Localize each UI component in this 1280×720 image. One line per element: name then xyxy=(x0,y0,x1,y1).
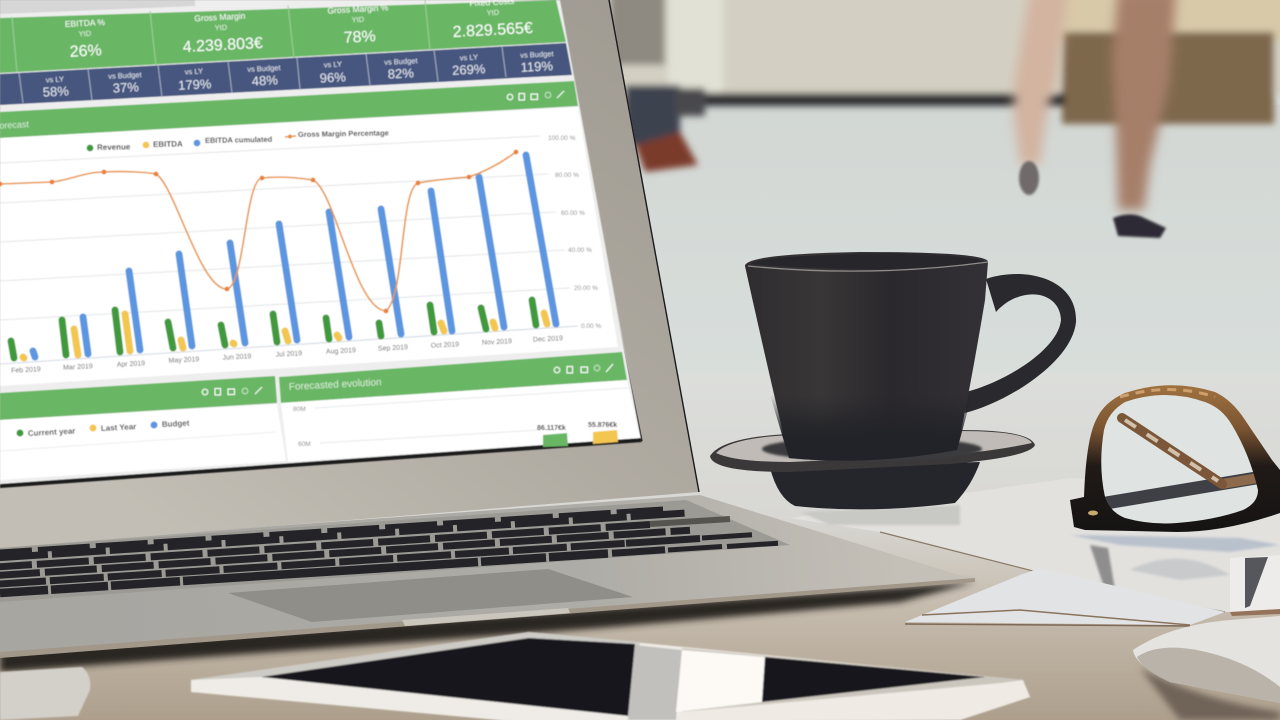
KPI comparison navy band: 119% xyxy=(520,58,554,75)
KPI comparison navy band: vs LY xyxy=(324,60,342,69)
bottom right panel: forecasted evolution: 80M xyxy=(293,406,306,413)
KPI comparison navy band: 37% xyxy=(112,79,140,96)
KPI comparison navy band: vs LY xyxy=(460,53,478,62)
month axis labels: Oct 2019 xyxy=(431,341,459,350)
month axis labels xyxy=(11,335,563,375)
computer mouse xyxy=(1133,616,1280,720)
chart legend: Revenue xyxy=(97,142,131,152)
chart legend: EBITDA cumulated xyxy=(205,135,273,145)
coffee cup xyxy=(745,252,1076,461)
month axis labels: Mar 2019 xyxy=(63,363,93,372)
month axis labels: Jul 2019 xyxy=(276,350,302,359)
tablet xyxy=(191,632,1030,720)
right axis labels: 60.00 % xyxy=(561,210,585,217)
KPI comparison navy band: vs Budget xyxy=(384,56,419,67)
KPI comparison navy band: 179% xyxy=(178,76,212,93)
right axis labels: 0.00 % xyxy=(581,323,601,330)
month axis labels: Dec 2019 xyxy=(533,335,563,344)
KPI: Fixed Costs xyxy=(452,0,533,41)
right axis labels: 40.00 % xyxy=(568,247,592,254)
KPI: Fixed Costs: YtD xyxy=(486,8,500,17)
KPI: Fixed Costs: 2.829.565€ xyxy=(452,20,533,41)
bottom right panel: forecasted evolution: Forecasted evolution xyxy=(289,377,382,393)
KPI: Gross Margin %: 78% xyxy=(343,28,376,47)
orange gross margin line xyxy=(0,150,518,313)
KPI: Gross Margin %: Gross Margin % xyxy=(327,2,389,16)
chart legend: EBITDA xyxy=(153,139,183,149)
month axis labels: May 2019 xyxy=(168,356,200,365)
desk surface xyxy=(0,372,1280,720)
pen on desk xyxy=(0,667,90,720)
blue EBITDA cumulated bars xyxy=(33,155,556,357)
KPI comparison navy band: 48% xyxy=(251,72,279,89)
bottom right panel: forecasted evolution xyxy=(279,352,640,462)
eyeglasses xyxy=(1070,385,1280,532)
KPI: Gross Margin xyxy=(182,11,263,56)
bottom right panel: forecasted evolution: 60M xyxy=(298,441,311,448)
KPI: EBITDA % xyxy=(65,17,106,61)
panel icons xyxy=(507,91,564,100)
right axis labels: 100.00 % xyxy=(548,135,576,142)
bottom left panel: Current year xyxy=(28,427,76,438)
bottom left panel: Budget xyxy=(162,419,190,429)
right axis labels xyxy=(548,135,601,330)
KPI comparison navy band: 269% xyxy=(452,61,486,78)
yellow EBITDA bars xyxy=(23,313,547,358)
papers xyxy=(790,478,1280,626)
laptop keyboard xyxy=(0,500,790,602)
KPI comparison navy band: vs Budget xyxy=(520,49,555,60)
bottom left panel: Last Year xyxy=(101,422,136,433)
laptop shadow on desk xyxy=(0,582,975,672)
KPI: Gross Margin %: YtD xyxy=(351,15,365,24)
chart legend: Gross Margin Percentage xyxy=(298,128,389,139)
toolbar strip xyxy=(0,0,195,14)
laptop trackpad xyxy=(228,569,633,622)
right axis labels: 80.00 % xyxy=(555,172,579,179)
laptop screen xyxy=(0,0,642,488)
KPI: Gross Margin: 4.239.803€ xyxy=(182,35,263,56)
month axis labels: Apr 2019 xyxy=(117,360,145,369)
bottom right panel: forecasted evolution: 86.117€k xyxy=(537,425,566,432)
month axis labels: Aug 2019 xyxy=(326,347,356,356)
month axis labels: Nov 2019 xyxy=(482,338,512,347)
green revenue bars xyxy=(11,300,536,358)
right axis labels: 20.00 % xyxy=(574,285,598,292)
chart gridlines xyxy=(0,136,578,364)
month axis labels: Jun 2019 xyxy=(222,353,252,362)
KPI: EBITDA %: EBITDA % xyxy=(65,17,106,29)
month axis labels: Sep 2019 xyxy=(378,344,408,353)
KPI comparison navy band: 96% xyxy=(319,69,347,86)
KPI: EBITDA %: YtD xyxy=(78,29,92,38)
KPI comparison navy band xyxy=(0,43,572,105)
month axis labels: Feb 2019 xyxy=(11,366,41,375)
KPI comparison navy band: 58% xyxy=(42,83,70,100)
laptop lid bezel xyxy=(0,0,699,548)
KPI: EBITDA %: 26% xyxy=(69,42,102,61)
KPI comparison navy band: vs Budget xyxy=(247,63,282,74)
KPI comparison navy band: vs LY xyxy=(185,67,203,76)
chart legend xyxy=(87,128,389,152)
forecast panel header xyxy=(0,81,578,138)
KPI: Gross Margin: Gross Margin xyxy=(194,11,246,23)
KPI: Gross Margin % xyxy=(327,2,389,47)
KPI comparison navy band: 82% xyxy=(387,65,415,82)
bottom left panel xyxy=(0,376,286,480)
bottom right panel: forecasted evolution: 55.876€k xyxy=(588,422,617,429)
forecast chart panel xyxy=(0,107,618,386)
KPI green band xyxy=(0,0,566,73)
KPI comparison navy band: vs Budget xyxy=(108,70,143,81)
laptop base xyxy=(0,495,975,658)
KPI comparison navy band: vs LY xyxy=(46,75,64,84)
coffee saucer xyxy=(710,430,1035,509)
KPI: Gross Margin: YtD xyxy=(214,23,228,32)
